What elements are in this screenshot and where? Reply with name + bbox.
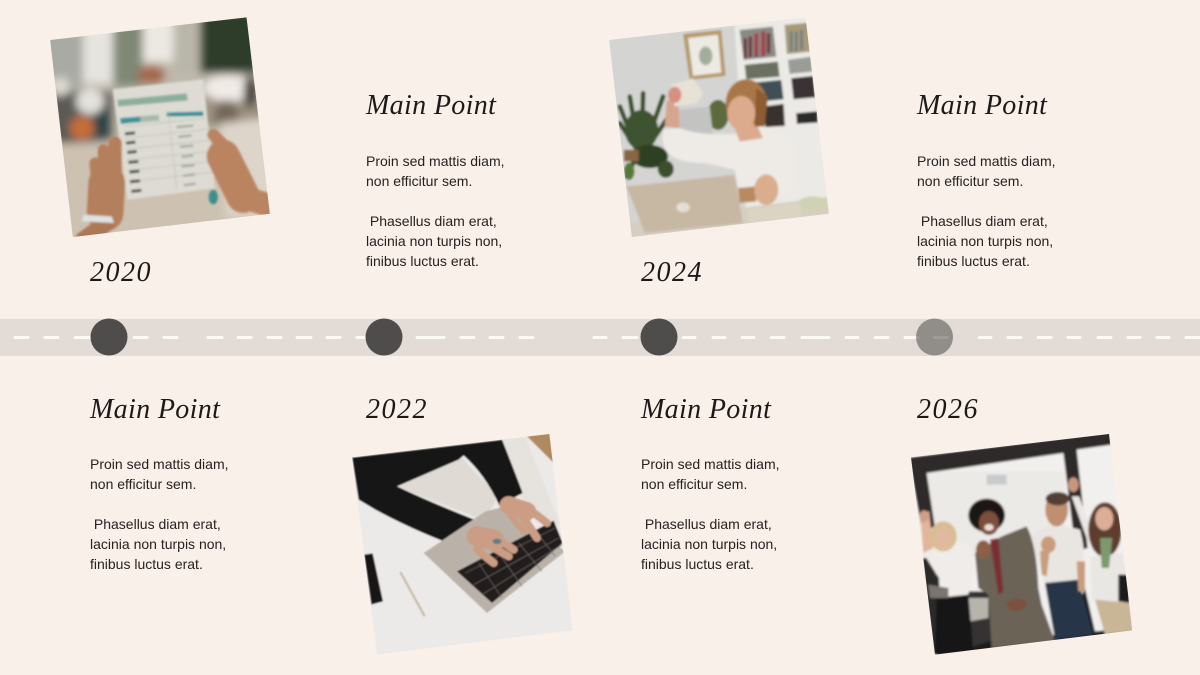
woman right [1070,494,1088,538]
heading: Main Point [366,90,496,121]
body text: Proin sed mattis diam, non efficitur sem. Phasellus diam erat, lacinia non turpis non, finibus luctus erat. [917,153,1056,269]
year label: 2024: 2024 [641,257,703,288]
body text: Proin sed mattis diam, non efficitur sem. Phasellus diam erat, lacinia non turpis non, finibus luctus erat. [366,153,504,269]
milestone text: 2022 main point [366,90,504,269]
woman left [920,511,933,553]
hands [477,505,547,563]
photo: team cheering in an office [911,434,1132,654]
right hand [213,135,273,206]
left hand [83,143,115,240]
phone and pen [364,553,383,605]
heading: Main Point [917,90,1047,121]
photo: hands typing on a laptop [352,434,572,654]
frame [683,30,726,80]
heading: Main Point [641,394,771,425]
milestone text: 2024 main point [640,394,780,572]
body text: Proin sed mattis diam, non efficitur sem. Phasellus diam erat, lacinia non turpis non, finibus luctus erat. [90,456,228,572]
year label: 2022: 2022 [366,394,428,425]
laptop [424,506,565,613]
milestone text: 2020 main point [90,394,228,572]
sleeves [352,440,523,550]
woman [662,127,745,188]
photo: hands holding a report card [50,17,270,237]
heading: Main Point [90,394,220,425]
milestone text: 2026 main point [916,90,1056,269]
card [113,79,215,200]
photo: woman at a laptop by a bookcase [609,18,829,237]
table [626,196,833,240]
year label: 2020: 2020 [90,257,152,288]
body text: Proin sed mattis diam, non efficitur sem. Phasellus diam erat, lacinia non turpis non, finibus luctus erat. [641,456,780,572]
timeline band with dashed road and milestone dots [0,318,1200,356]
plants [620,93,670,176]
man in suit [975,526,1055,648]
laptop [626,175,743,233]
year label: 2026: 2026 [917,394,979,425]
man white shirt [1039,526,1086,583]
